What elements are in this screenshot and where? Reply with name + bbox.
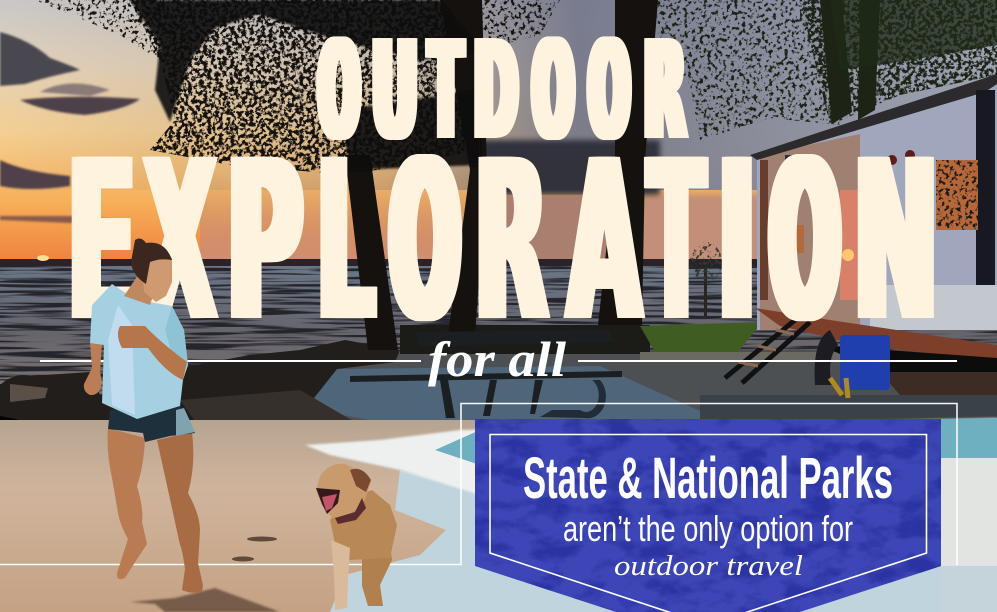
title: EXPLORATION: R: [474, 114, 547, 371]
distant tree on the lawn: [690, 242, 722, 318]
right tree canopy: [655, 0, 840, 140]
shorts: [108, 405, 195, 442]
rule left of "for all": [40, 360, 421, 362]
clouds: [0, 32, 140, 223]
picnic table: [350, 330, 622, 418]
face: [142, 258, 172, 302]
title: EXPLORATION: O: [770, 114, 839, 371]
sea foam and wet shoreline: [305, 418, 997, 612]
RV trailer: [750, 74, 997, 395]
head: [316, 464, 371, 518]
horizon and sun: [0, 255, 997, 266]
left leg: [108, 428, 147, 579]
banner: [475, 419, 941, 612]
title: OUTDOOR: R: [644, 12, 685, 171]
banner inner outline: [490, 434, 926, 612]
upper right foliage: [830, 0, 997, 70]
title: OUTDOOR: T: [429, 12, 463, 171]
title: OUTDOOR: U: [372, 12, 418, 171]
title: EXPLORATION: E: [68, 114, 136, 371]
title: EXPLORATION: X: [144, 114, 216, 371]
subheading: aren’t the only option for: [563, 508, 853, 549]
title: OUTDOOR: O: [589, 12, 629, 171]
collar: [335, 498, 366, 524]
camp chair: [815, 330, 890, 398]
RV steps: [725, 320, 810, 383]
text: for all: for all: [428, 331, 566, 387]
hair: [131, 239, 172, 284]
dense dark foliage: [130, 0, 480, 170]
title: OUTDOOR: O: [533, 12, 573, 171]
tree trunks: [345, 0, 880, 350]
left tree canopy: [130, 0, 480, 175]
ground behind the beach: [300, 322, 997, 428]
title: OUTDOOR: D: [474, 12, 518, 171]
open mouth: [316, 488, 340, 514]
woman's shadow on the sand: [130, 588, 280, 612]
neck: [124, 272, 160, 305]
title: EXPLORATION: T: [648, 114, 704, 371]
title: EXPLORATION: P: [227, 114, 303, 371]
title: EXPLORATION: I: [718, 114, 756, 371]
title: EXPLORATION: N: [854, 114, 938, 371]
shoreline rocks: [0, 340, 400, 432]
body: [330, 490, 397, 560]
dog: [316, 464, 397, 610]
sky: [0, 0, 997, 267]
title: EXPLORATION: A: [568, 114, 640, 371]
subheading italic: outdoor travel: [614, 551, 803, 582]
rule right of "for all": [578, 360, 957, 362]
title: OUTDOOR: O: [319, 12, 359, 171]
beach sand: [0, 420, 997, 612]
front leg: [331, 540, 350, 610]
footprints in sand: [232, 536, 277, 562]
forearm and hand: [118, 326, 187, 380]
outline frame: [0, 404, 957, 565]
right tree dense foliage: [800, 0, 997, 125]
left arm: [84, 343, 102, 395]
title: EXPLORATION: L: [317, 114, 374, 371]
ear: [350, 469, 371, 492]
lake water: [0, 266, 997, 401]
banner shape: [475, 419, 941, 612]
right leg: [157, 432, 203, 593]
title: EXPLORATION: O: [390, 114, 459, 371]
woman running: [84, 239, 203, 593]
left tree outer branches: [35, 0, 560, 60]
shirt: [90, 284, 188, 419]
back leg: [362, 545, 392, 606]
